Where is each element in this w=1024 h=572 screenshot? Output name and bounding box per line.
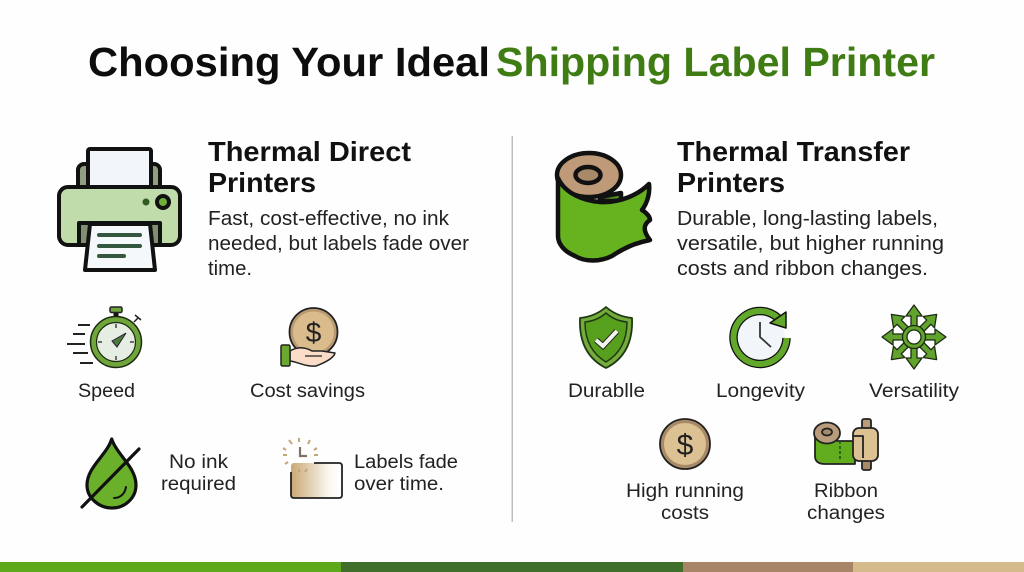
label <box>161 452 236 495</box>
heading: thermal transfer: Printers <box>677 167 785 198</box>
icon: coin in hand: $ <box>306 317 322 348</box>
description: thermal transfer <box>677 208 944 280</box>
label: Labels fade <box>354 452 458 473</box>
description: thermal transfer: costs and ribbon changes. <box>677 258 928 280</box>
divider <box>512 136 513 522</box>
label: Longevity <box>716 381 806 402</box>
panel: thermal transfer printers <box>557 136 960 524</box>
title <box>88 39 935 85</box>
heading: thermal transfer: Thermal Transfer <box>677 136 910 167</box>
description: thermal direct: Fast, cost-effective, no ink <box>208 208 450 230</box>
title: Choosing Your Ideal <box>88 39 490 85</box>
icon: shield with check <box>580 307 632 368</box>
title: Shipping Label Printer <box>496 39 935 85</box>
label: High running <box>626 481 744 502</box>
label: Ribbon <box>814 481 878 502</box>
label <box>807 481 885 524</box>
label: Durablle <box>568 381 645 402</box>
description: thermal transfer: versatile, but higher running <box>677 233 944 255</box>
icon: stopwatch <box>67 307 142 368</box>
label: No ink <box>169 452 229 473</box>
feature: cost savings <box>250 308 365 402</box>
icon: dollar coin: $ <box>677 429 694 462</box>
icon: printer <box>59 149 180 270</box>
icon: crossed-out ink drop <box>82 439 139 508</box>
label: Cost savings <box>250 381 365 402</box>
feature: ribbon changes <box>807 419 885 524</box>
label: required <box>161 474 236 495</box>
label <box>626 481 744 524</box>
feature: no ink required <box>82 439 236 508</box>
label: changes <box>807 503 885 524</box>
feature: versatility <box>869 305 960 402</box>
heading: thermal transfer <box>677 136 910 198</box>
label: over time. <box>354 474 444 495</box>
feature: speed <box>67 307 142 402</box>
label: Speed <box>78 381 135 402</box>
heading: thermal direct <box>208 136 411 198</box>
feature: durable <box>568 307 645 402</box>
label <box>354 452 458 495</box>
icon: fading label with clock <box>283 438 342 498</box>
heading: thermal direct: Printers <box>208 167 316 198</box>
feature: longevity <box>716 311 806 402</box>
heading: thermal direct: Thermal Direct <box>208 136 411 167</box>
label: Versatility <box>869 381 960 402</box>
icon: label roll <box>557 153 650 260</box>
icon: arrows radiating from a hub <box>882 305 946 369</box>
feature: high running costs <box>626 419 744 524</box>
description: thermal transfer: Durable, long-lasting labels, <box>677 208 938 230</box>
bottom colour band <box>0 562 1024 572</box>
label: costs <box>661 503 709 524</box>
description: thermal direct <box>208 208 469 280</box>
description: thermal direct: needed, but labels fade over <box>208 233 469 255</box>
icon: ribbon rolls <box>814 419 878 470</box>
feature: labels fade over time <box>283 438 458 498</box>
description: thermal direct: time. <box>208 258 252 280</box>
panel: thermal direct printers <box>59 136 469 508</box>
icon: clock with circular arrow <box>734 311 786 364</box>
